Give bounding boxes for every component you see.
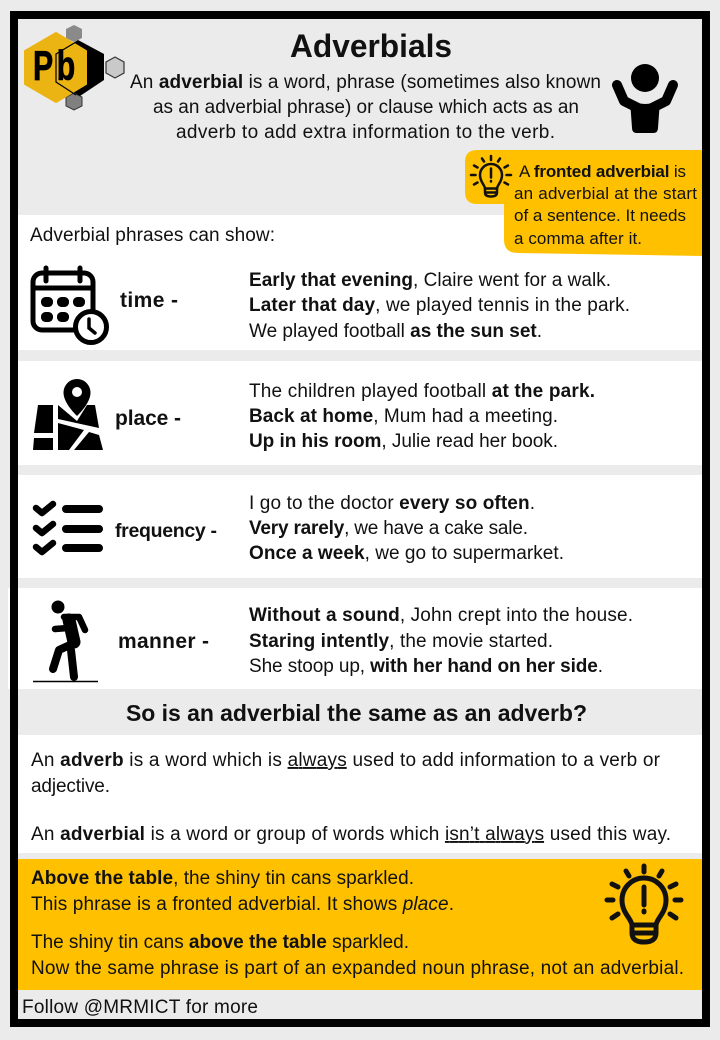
place examples: Back at home, Mum had a meeting. [249,406,558,427]
definition text: An adverbial is a word, phrase (sometimes also known [130,72,601,93]
footer: Follow @MRMICT for more [22,997,258,1018]
panel: adverb vs adverbial [18,735,702,853]
label: frequency: frequency - [115,520,217,542]
example text: The shiny tin cans above the table sparkled. [31,932,409,953]
icon: calendar with clock [33,268,106,342]
place examples: Up in his room, Julie read her book. [249,431,558,452]
panel: header [18,19,702,215]
adverbial definition: An adverbial is a word or group of words which isn’t always used this way. [31,824,671,845]
time examples: Early that evening, Claire went for a walk. [249,270,611,291]
place examples [249,381,595,452]
callout text: A fronted adverbial is [519,162,686,181]
panel: time [18,255,702,350]
example text: Now the same phrase is part of an expanded noun phrase, not an adverbial. [31,958,684,979]
frequency examples: Once a week, we go to supermarket. [249,543,564,564]
icon: person with raised arms [617,64,673,133]
panel: example [18,859,702,990]
example text [31,868,684,979]
label: manner: manner - [118,630,209,653]
place examples: The children played football at the park. [249,381,595,402]
label: time: time - [120,289,178,312]
icon: walking figure [33,600,98,682]
example text: Above the table, the shiny tin cans sparkled. [31,868,414,889]
heading: comparison question: So is an adverbial the same as an adverb? [126,700,587,726]
definition text: as an adverbial phrase) or clause which acts as an [153,97,579,118]
time examples: We played football as the sun set. [249,321,542,342]
panel: adverbial phrases intro [18,215,702,255]
panel: place [18,361,702,465]
title: Adverbials [290,28,452,64]
intro text: Adverbial phrases can show: [30,225,275,246]
icon: Pb logo [25,25,124,110]
icon: checklist [36,504,99,552]
manner examples: Staring intently, the movie started. [249,631,553,652]
icon: small lightbulb [471,156,511,196]
adverb definition: An adverb is a word which is always used to add information to a verb or [31,750,661,771]
icon: map with pin [33,379,103,450]
callout text: an adverbial at the start [514,184,697,203]
label: place: place - [115,407,181,430]
manner examples [249,605,633,677]
callout text: of a sentence. It needs [514,206,686,225]
panel: manner [18,588,702,689]
manner examples: She stoop up, with her hand on her side. [249,656,603,677]
definition text: adverb to add extra information to the verb. [176,122,555,143]
frequency examples: I go to the doctor every so often. [249,493,535,514]
adverb definition [31,750,661,797]
definition text [130,72,601,143]
icon: Pb logo: Pb [33,42,75,89]
time examples [249,270,630,342]
callout text [514,162,697,248]
time examples: Later that day, we played tennis in the park. [249,295,630,316]
example text: This phrase is a fronted adverbial. It shows place. [31,894,454,915]
icon: large lightbulb [607,866,681,942]
frequency examples: Very rarely, we have a cake sale. [249,518,528,539]
callout: fronted adverbial [465,150,702,256]
adverb definition: adjective. [31,776,110,797]
frequency examples [249,493,564,564]
callout text: a comma after it. [514,229,642,248]
manner examples: Without a sound, John crept into the house. [249,605,633,626]
panel: frequency [18,475,702,578]
